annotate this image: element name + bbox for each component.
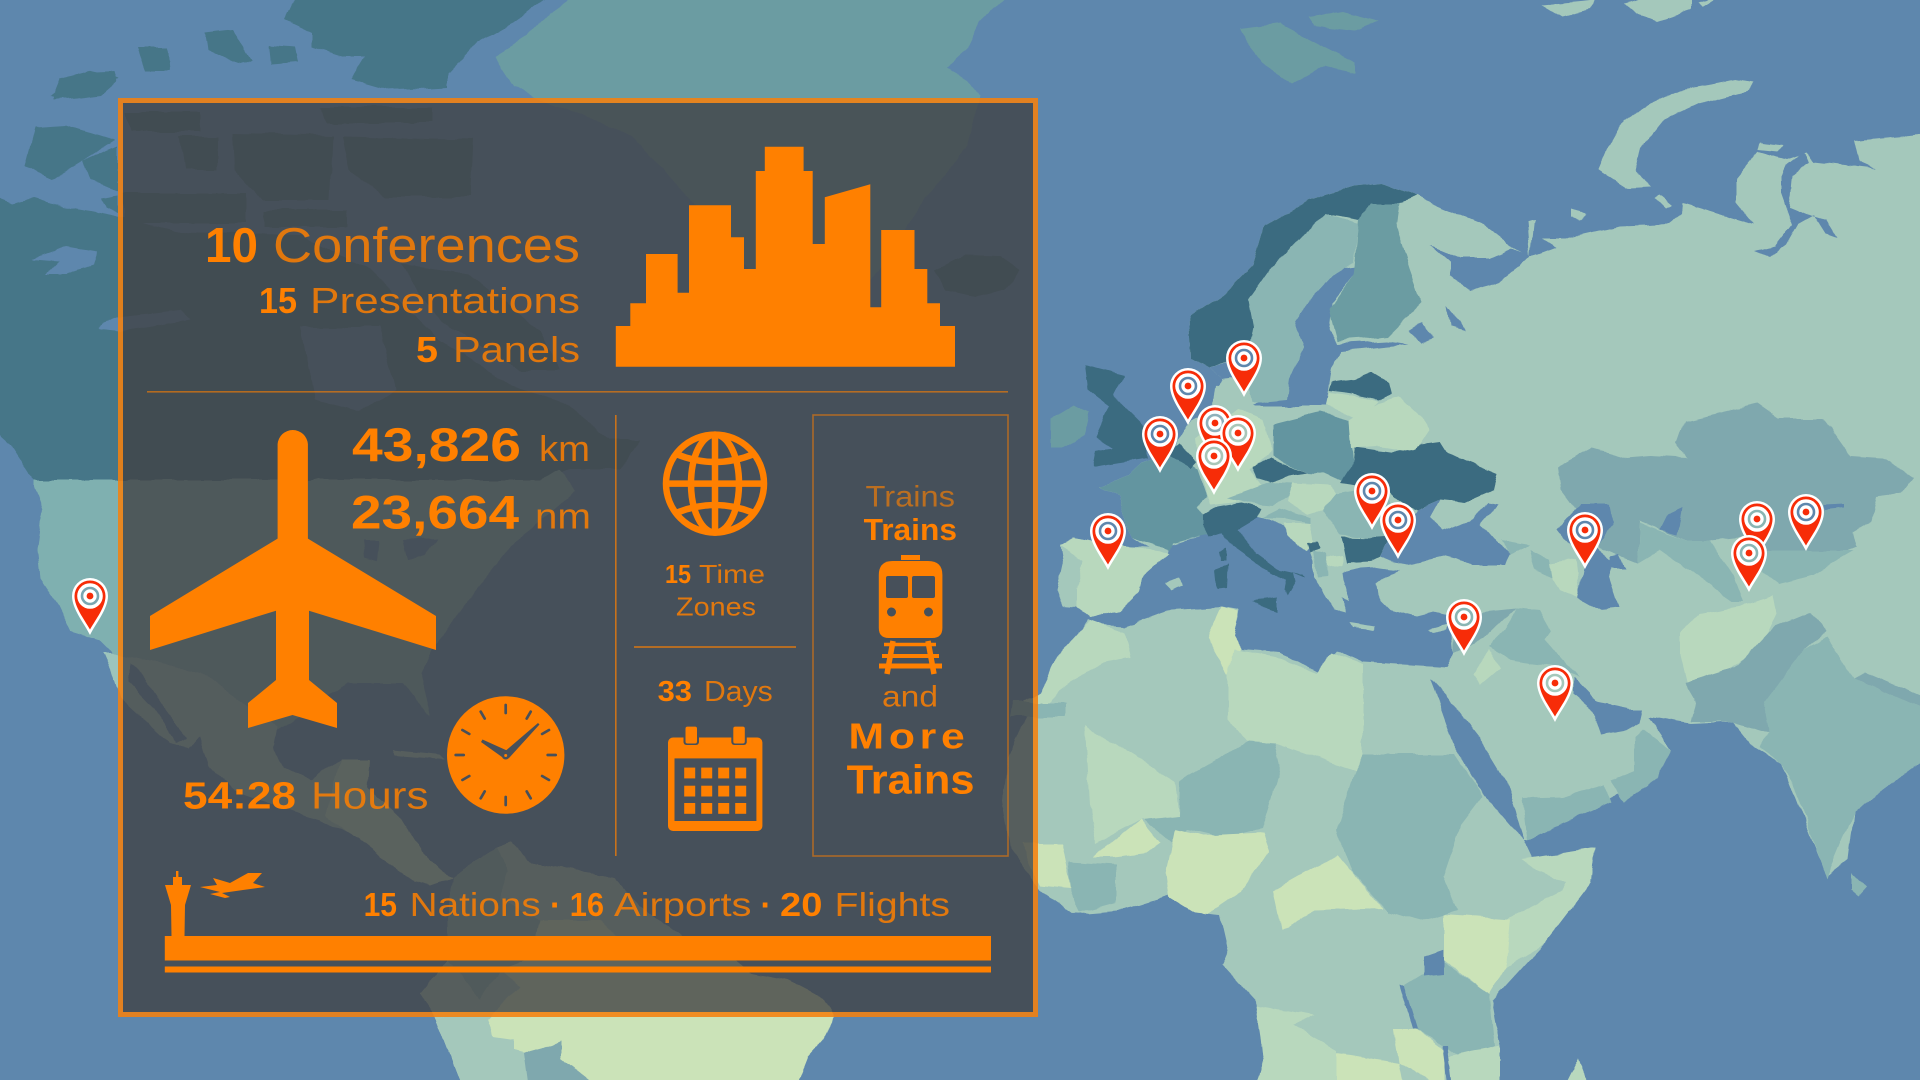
text: time zones: Zones [676,592,756,622]
text: nations airports flights: Nations [410,886,541,923]
text: trains bold: Trains [864,512,957,547]
pin: Kazakhstan [1739,501,1775,558]
countries: Middle East [1453,607,1671,840]
text: time zones [665,559,765,622]
text: flight hours [183,776,428,818]
seas: Skagerrak and Baltic [1208,265,1408,406]
panel: days [658,676,773,831]
pin: Spain [1090,513,1126,570]
pin: Saudi Arabia [1537,665,1573,722]
icon: control tower [165,871,191,936]
map pins [72,340,1824,722]
countries: Scandinavia [1189,183,1422,410]
landmass: United States [33,470,575,730]
text: nations airports flights: 15 [364,886,397,923]
text: and: and [882,680,938,714]
landmass: Canada [0,194,640,480]
pin: Denmark [1226,340,1262,397]
pin: Levant [1446,599,1482,656]
text: panels count [416,329,580,370]
text: panels count: Panels [453,329,580,370]
icon: clock [447,696,564,814]
landmass: Madagascar [1562,1058,1590,1080]
icon: calendar [668,725,762,831]
pin: England [1142,416,1178,473]
pin: Uzbekistan [1731,535,1767,592]
text: nations airports flights: 20 [780,886,822,923]
text: time zones: 15 [665,559,691,589]
panel: time zones [665,434,765,622]
icon: runway [165,936,991,972]
countries: Europe [1051,365,1497,633]
text: time zones: Time [699,559,765,589]
text: presentations count [259,280,580,321]
text: distance km: km [539,428,590,469]
landmass: Central America [325,760,453,885]
text: nations airports flights: · [760,886,772,923]
text: more: More [848,716,970,757]
pin: North Sea [1170,368,1206,425]
countries: Central Asia [1500,404,1920,898]
text: distance nm: 23,664 [351,486,519,539]
text: conferences count: 10 [205,219,258,273]
icon: globe [666,434,764,533]
landmass: Cuba [393,750,445,760]
countries: Africa [1012,607,1595,1080]
text: presentations count: Presentations [310,280,580,321]
pin: Azerbaijan [1567,512,1603,569]
text: nations airports flights [364,886,950,923]
text: days [658,676,773,708]
text: nations airports flights: 16 [570,886,604,923]
icon: city skyline [616,147,955,367]
text: trains big: Trains [847,757,974,803]
pin: Romania [1354,473,1390,530]
pin: Germany south [1196,438,1232,495]
text: days: 33 [658,676,692,708]
landmass: Arctic islands [1542,0,1782,220]
pin: Netherlands [1197,405,1233,462]
landmass: Mexico [103,653,350,833]
landmass: Iceland [935,255,1020,297]
text: conferences count: Conferences [273,219,580,273]
pin: Almaty [1788,494,1824,551]
icon: airplane [150,430,436,728]
text: distance km [352,418,590,471]
panel: conferences [205,147,955,370]
text: distance km: 43,826 [352,418,521,471]
text: distance nm: nm [535,496,591,537]
seas and lakes [1380,152,1845,1080]
pin: Germany north [1220,415,1256,472]
text: nations airports flights: Airports [614,886,752,923]
text: panels count: 5 [416,329,438,370]
pin: Los Angeles [72,578,108,635]
text: trains light: Trains [866,480,955,514]
icon: train [879,555,942,674]
text: flight hours: 54:28 [183,776,296,818]
landmass: South America [420,842,834,1080]
text: days: Days [704,676,773,708]
icon: departing plane [200,873,265,898]
pin: Bulgaria [1380,502,1416,559]
panel: airports [165,871,991,972]
panel: trains [813,415,1008,856]
landmass: Canadian arctic islands [25,0,560,370]
text: distance nm [351,486,591,539]
text: presentations count: 15 [259,280,297,321]
panel: background [120,100,1036,1014]
landmass: Eurasia and Africa [1002,134,1920,1080]
text: nations airports flights: · [550,886,561,923]
text: nations airports flights: Flights [834,886,950,923]
panel: flight statistics [150,418,591,818]
landmass: Greenland [495,0,1014,306]
text: flight hours: Hours [311,776,428,818]
landmass: Svalbard [1239,12,1377,84]
